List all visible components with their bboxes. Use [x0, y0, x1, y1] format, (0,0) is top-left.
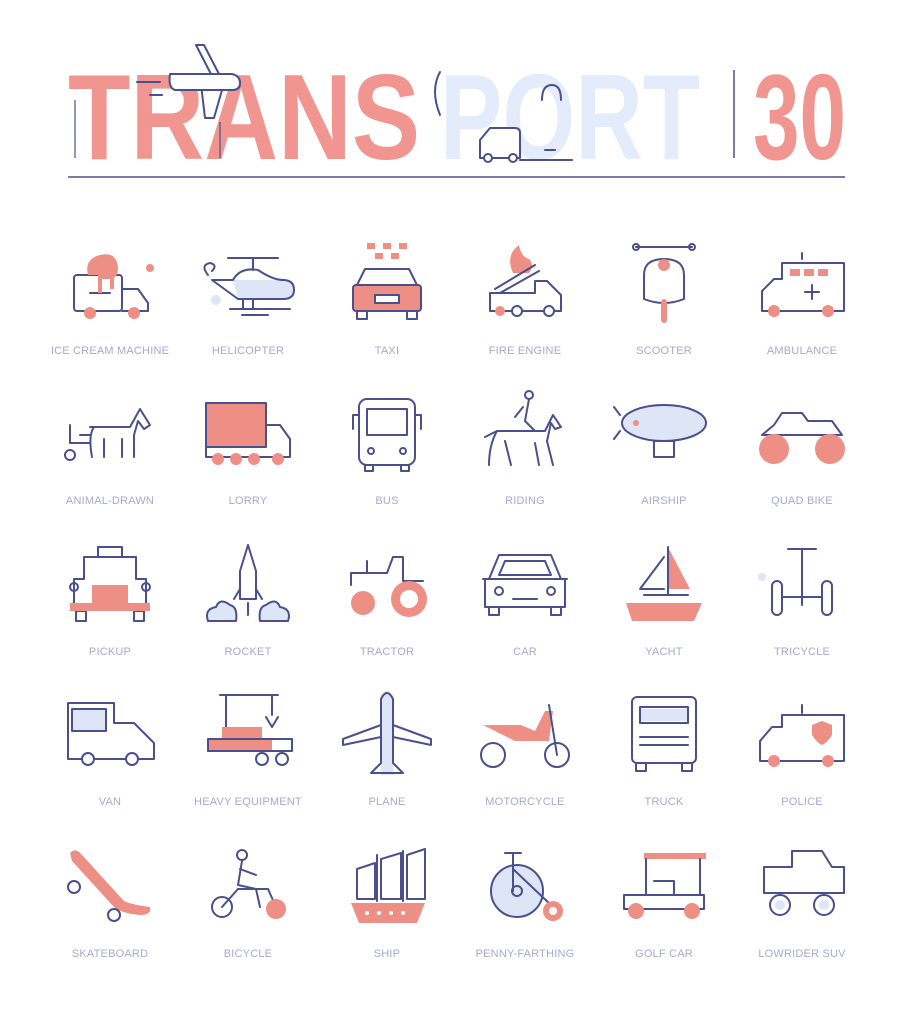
icon: ambulance [762, 253, 844, 317]
icon: truck [632, 697, 696, 771]
label: rocket: ROCKET [224, 646, 272, 658]
label: ship: SHIP [374, 948, 400, 960]
label: penny-farthing: PENNY-FARTHING [476, 948, 574, 960]
icon: golf car [624, 853, 706, 919]
label: helicopter: HELICOPTER [212, 345, 284, 357]
icon: bus [353, 399, 421, 471]
icon: tricycle [758, 549, 832, 615]
label: police: POLICE [781, 796, 823, 808]
label: truck: TRUCK [645, 796, 684, 808]
icon: pickup [70, 547, 150, 621]
label: fire engine: FIRE ENGINE [489, 345, 561, 357]
title: PORT [440, 49, 700, 185]
icon: fire engine [490, 245, 561, 316]
label: ambulance: AMBULANCE [767, 345, 837, 357]
label: tricycle: TRICYCLE [774, 646, 830, 658]
label: bus: BUS [375, 495, 399, 507]
icon: yacht [626, 547, 702, 621]
icon: bicycle [212, 850, 286, 919]
icon: scooter [633, 244, 695, 323]
title: TRANS [68, 49, 420, 185]
label: ice cream machine: ICE CREAM MACHINE [51, 345, 169, 357]
icon: van [68, 703, 154, 765]
label: riding: RIDING [505, 495, 545, 507]
icon: lowrider suv [764, 851, 844, 915]
icon: penny-farthing [491, 853, 563, 921]
label: golf car: GOLF CAR [635, 948, 693, 960]
icon: plane [343, 691, 431, 775]
label: airship: AIRSHIP [641, 495, 687, 507]
label: van: VAN [99, 796, 121, 808]
label: car: CAR [513, 646, 537, 658]
icon: ship [351, 849, 425, 923]
icon: tractor [351, 557, 427, 617]
label: pickup: PICKUP [89, 646, 131, 658]
icon: quad bike [759, 413, 845, 464]
label: motorcycle: MOTORCYCLE [485, 796, 565, 808]
divider [68, 176, 845, 178]
icon: title police van [435, 72, 572, 162]
icon: riding [485, 391, 561, 465]
label: lowrider suv: LOWRIDER SUV [758, 948, 846, 960]
label: heavy equipment: HEAVY EQUIPMENT [194, 796, 302, 808]
label: lorry: LORRY [229, 495, 268, 507]
label: yacht: YACHT [645, 646, 683, 658]
label: skateboard: SKATEBOARD [72, 948, 148, 960]
title: 30 [753, 49, 846, 185]
icon: police [760, 705, 844, 767]
icon: motorcycle [481, 705, 569, 767]
label: bicycle: BICYCLE [224, 948, 272, 960]
icon: title plane [137, 45, 240, 118]
icon: airship [614, 405, 706, 457]
icon: rocket [207, 545, 289, 621]
icon: lorry [206, 403, 290, 465]
icon: skateboard [68, 850, 150, 921]
icon: car [483, 555, 567, 615]
icon: taxi [353, 243, 421, 319]
title [68, 49, 846, 185]
label: plane: PLANE [368, 796, 406, 808]
label: taxi: TAXI [375, 345, 399, 357]
icon: helicopter [204, 258, 294, 315]
icon: animal-drawn [65, 409, 150, 460]
icon: ice cream machine [74, 254, 154, 319]
label: animal-drawn: ANIMAL-DRAWN [66, 495, 154, 507]
label: scooter: SCOOTER [636, 345, 692, 357]
label: quad bike: QUAD BIKE [771, 495, 833, 507]
icon: heavy equipment [208, 695, 292, 765]
label: tractor: TRACTOR [360, 646, 414, 658]
